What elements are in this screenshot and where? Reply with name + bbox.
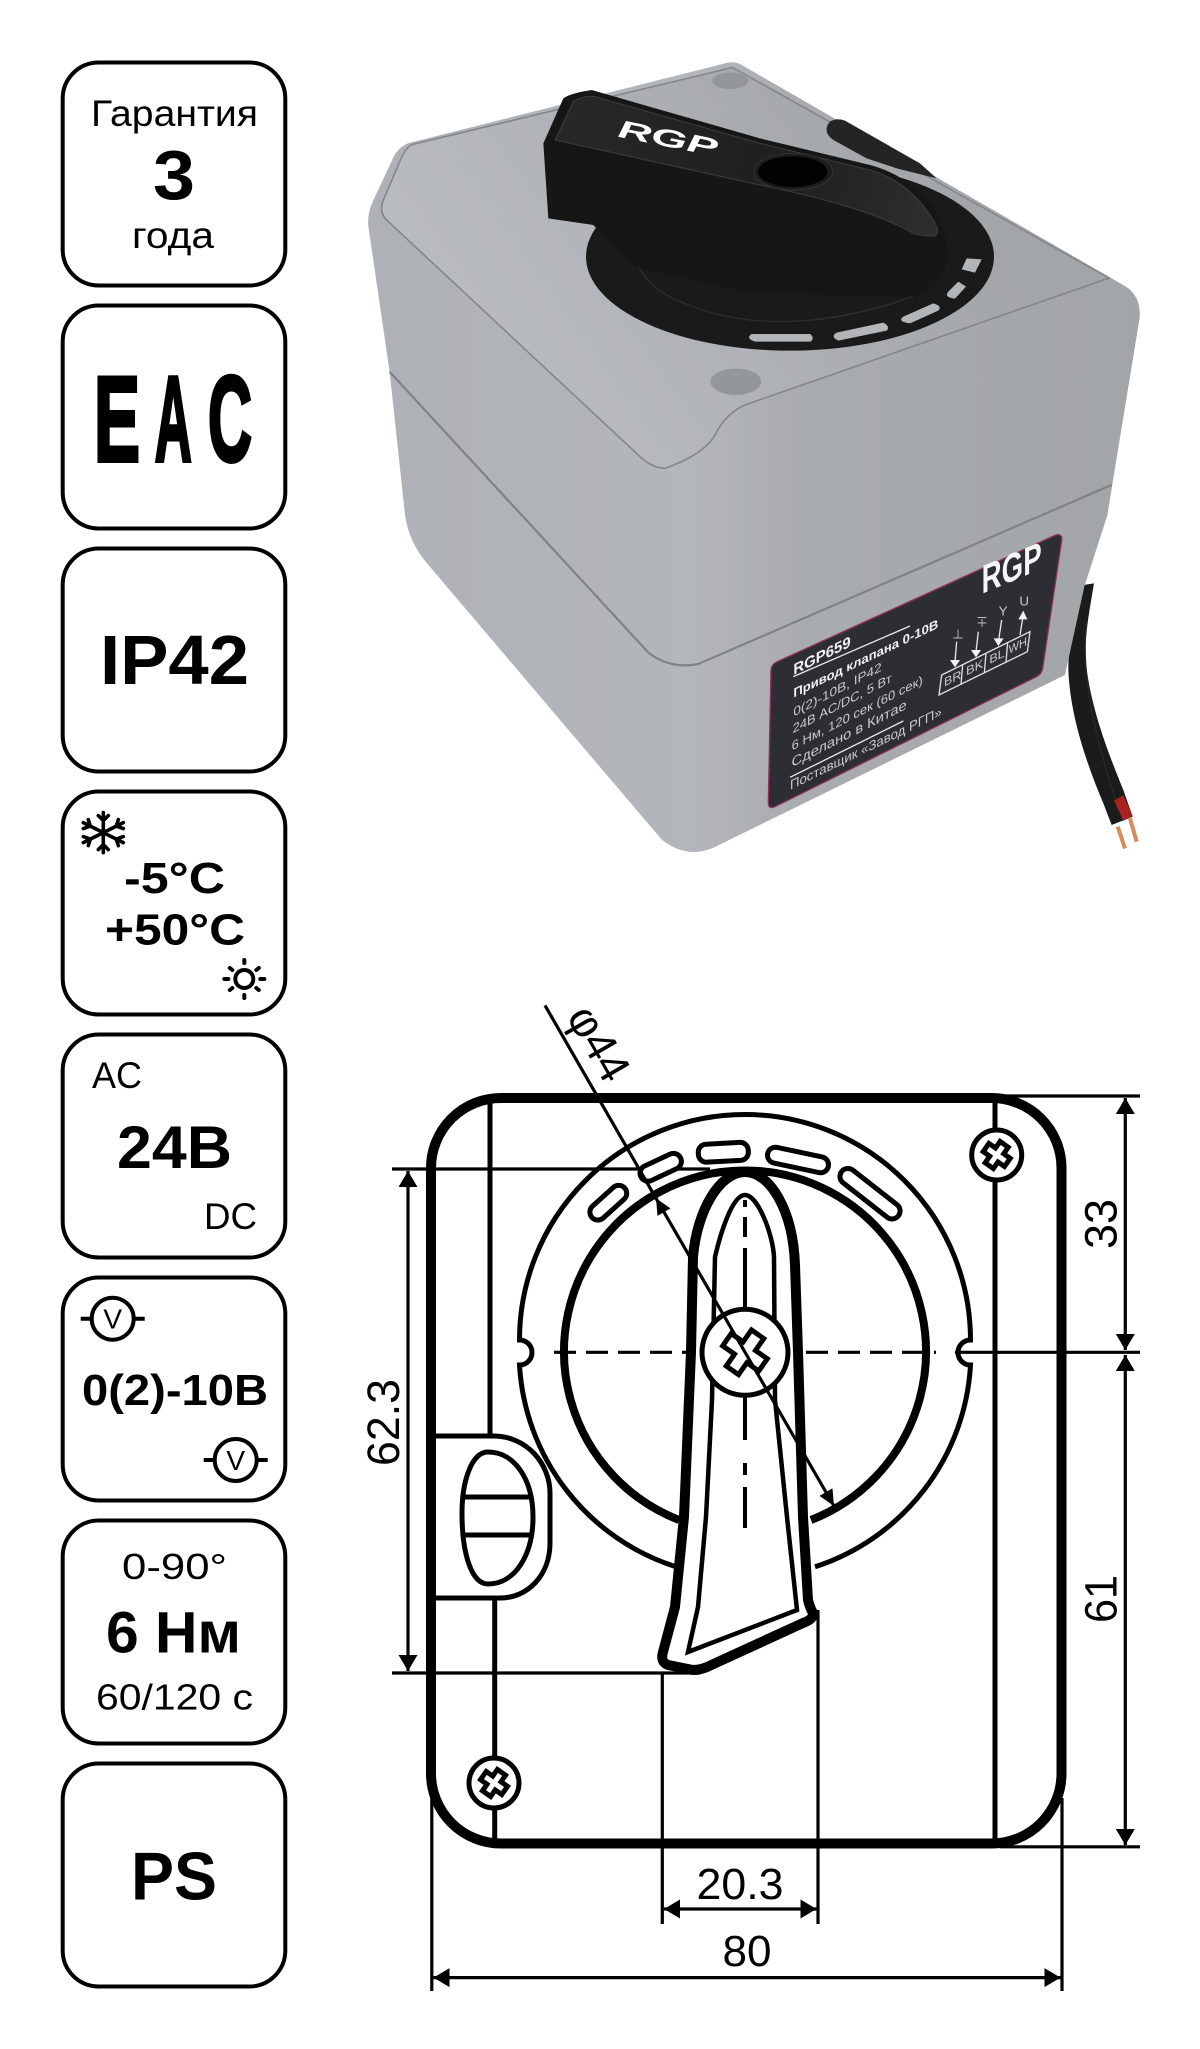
icon: voltmeter bottom: V [226, 1445, 245, 1476]
icon: sun [224, 960, 264, 998]
EAC mark [94, 351, 252, 487]
dimension: diameter 44: φ44 [557, 996, 641, 1090]
wiring terminal block: BK [966, 657, 984, 678]
scale slots [587, 1142, 903, 1223]
label rules [790, 626, 910, 777]
maximum temperature: +50°C [105, 906, 245, 955]
warranty label: Гарантия [91, 93, 258, 134]
label origin: Сделано в Китае [792, 697, 907, 771]
label logo: RGP [982, 532, 1042, 603]
housing outline [431, 1098, 1062, 1844]
material value: PS [131, 1839, 217, 1915]
handle [662, 1172, 813, 1670]
dimension extension lines [392, 1096, 1140, 1991]
dimension arrow 33 [1124, 1098, 1127, 1350]
label spec line 2: 24В AC/DC, 5 Вт [793, 671, 892, 736]
inner circle [564, 1170, 926, 1520]
icon: voltmeter top: V [103, 1304, 122, 1335]
wiring terminal block: U [1019, 594, 1029, 609]
dimension arrow 20.3 [664, 1907, 816, 1911]
dimension arrow 61 [1124, 1355, 1127, 1845]
EAC mark: A [155, 351, 192, 487]
warranty unit: года [132, 215, 214, 256]
dimension arrow 80 [434, 1976, 1060, 1979]
product label [768, 532, 1062, 808]
top face [381, 67, 1109, 468]
label spec line 1: 0(2)-10В, IP42 [793, 659, 882, 719]
wiring terminal block: ⊥ [952, 627, 964, 641]
EAC mark: E [94, 351, 140, 487]
torque value: 6 Нм [106, 1600, 241, 1666]
centre screw [702, 1309, 788, 1395]
wiring terminal block: BL [989, 646, 1005, 667]
dimension arrow 62.3 [406, 1171, 410, 1671]
handle logo: RGP [617, 115, 719, 163]
label spec line 3: 6 Нм, 120 сек (60 сек) [792, 673, 923, 753]
wiring terminal block [939, 594, 1030, 695]
dimension label 33: 33 [1076, 1199, 1126, 1249]
product illustration: actuator [368, 62, 1140, 852]
panel: control signal badge [63, 1278, 285, 1500]
technical drawing [358, 996, 1140, 1991]
diameter leader with arrows [545, 1005, 656, 1198]
horizontal centre line [554, 1351, 936, 1354]
screw bottom left [469, 1758, 519, 1808]
dimension label 80: 80 [722, 1927, 772, 1976]
wiring terminal block: Y [999, 604, 1008, 619]
icon: snowflake [83, 813, 123, 853]
handle top plate [555, 96, 937, 236]
handle centre line [743, 1200, 747, 1528]
mounting hole rear [712, 72, 749, 89]
rotation time: 60/120 с [96, 1677, 253, 1718]
minimum temperature: -5°C [124, 854, 225, 903]
AC label: AC [92, 1055, 142, 1096]
dimension label 62.3: 62.3 [358, 1379, 409, 1466]
icon: voltmeter bottom [204, 1439, 268, 1481]
housing seam [390, 372, 1112, 665]
wiring terminal block: ∓ [976, 615, 988, 629]
housing vertical edges [490, 1098, 995, 1843]
bearing ring with notches [520, 1114, 970, 1567]
voltage value: 24В [117, 1114, 232, 1181]
dial [586, 163, 994, 351]
dial slots [749, 258, 982, 342]
panel: torque badge [63, 1520, 285, 1744]
side knob [436, 1436, 550, 1598]
dimension label 20.3: 20.3 [696, 1860, 784, 1909]
wiring terminal block: BR [944, 668, 961, 689]
dial inner circle [632, 233, 927, 322]
cable [1068, 583, 1137, 848]
signal range value: 0(2)-10В [82, 1366, 268, 1415]
icon: voltmeter top [81, 1298, 145, 1340]
screw top right [972, 1130, 1022, 1180]
panel: housing material badge [63, 1764, 285, 1986]
rotation angle: 0-90° [122, 1546, 227, 1587]
housing [368, 62, 1140, 852]
dimension label 61: 61 [1076, 1575, 1126, 1623]
DC label: DC [204, 1196, 257, 1237]
panel: protection class badge [63, 548, 285, 772]
panel: supply voltage badge [63, 1034, 285, 1258]
handle hole [754, 153, 833, 190]
handle inner outline [688, 1195, 797, 1652]
panel: temperature range badge [63, 792, 285, 1014]
wiring terminal block: WH [1009, 635, 1027, 657]
warranty years value: 3 [153, 136, 195, 214]
diameter line [656, 1198, 834, 1506]
mounting hole front [710, 368, 761, 395]
label supplier: Поставщик «Завод РГП» [790, 703, 942, 793]
label product name: Привод клапана 0-10В [793, 616, 939, 701]
rotary dial and handle [543, 90, 994, 351]
panel: EAC mark badge [63, 306, 285, 528]
protection class value: IP42 [100, 621, 249, 699]
panel: warranty badge [63, 62, 285, 286]
model name: RGP659 [793, 633, 851, 679]
handle body [543, 90, 947, 297]
small lever [827, 119, 937, 178]
panel: EAC mark badge: C [208, 351, 252, 487]
